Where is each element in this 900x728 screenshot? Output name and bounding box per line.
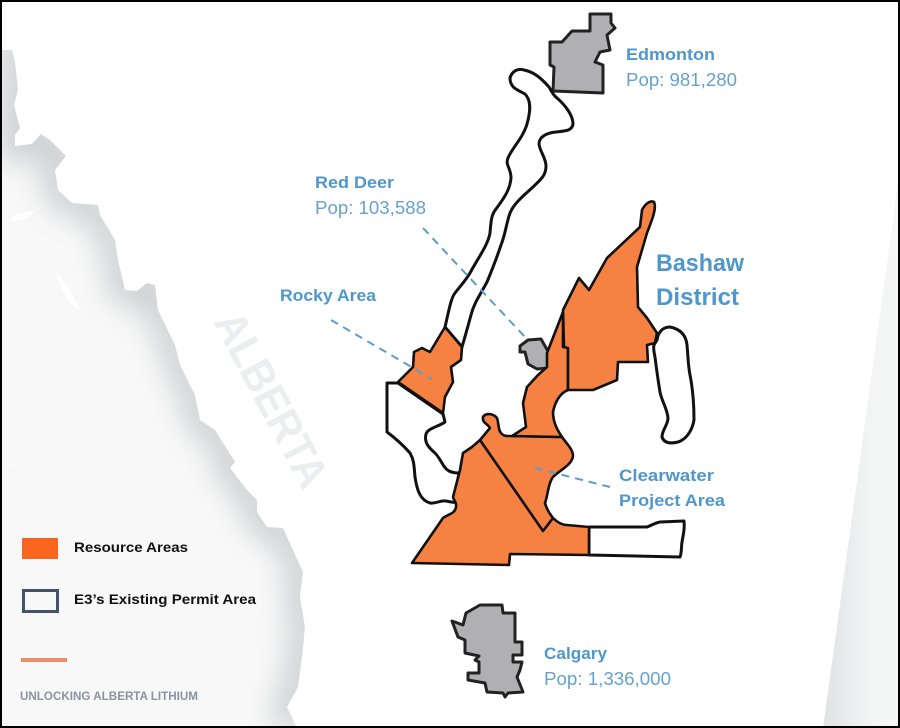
label: Calgary: Pop: 1,336,000	[544, 669, 671, 689]
label: Bashaw District: Bashaw	[656, 250, 744, 277]
resource area: Clearwater south	[412, 440, 589, 565]
western Alberta boundary shading	[2, 50, 305, 726]
footer tagline: UNLOCKING ALBERTA LITHIUM	[20, 691, 198, 703]
label: Calgary: Calgary	[544, 644, 608, 663]
icon: Calgary city outline	[452, 605, 523, 697]
resource area: central strip	[512, 312, 568, 437]
label: Edmonton	[626, 45, 737, 90]
label: Calgary	[544, 644, 671, 689]
resource area: Rocky	[398, 327, 462, 413]
icon: Red Deer city outline	[520, 339, 549, 369]
leader line: Rocky Area	[331, 320, 432, 379]
label: Rocky Area: Rocky Area	[280, 286, 377, 305]
legend label: resource areas: Resource Areas	[74, 539, 188, 555]
legend	[22, 538, 256, 612]
label: Bashaw District	[656, 250, 744, 311]
resource area: Bashaw	[563, 201, 657, 390]
permit area: southeast	[589, 521, 684, 557]
label: Edmonton: Edmonton	[626, 45, 715, 64]
legend swatch: resource areas	[22, 538, 58, 559]
label: Red Deer: Pop: 103,588	[315, 198, 426, 218]
leader line: Red Deer	[423, 228, 525, 337]
label: Edmonton: Pop: 981,280	[626, 70, 737, 90]
label: Clearwater Project Area	[619, 466, 726, 510]
accent rule	[21, 658, 67, 662]
legend swatch: permit area	[24, 590, 58, 612]
label: Bashaw District: District	[656, 284, 739, 311]
permit area: north corridor	[445, 69, 573, 347]
eastern Alberta boundary shading	[823, 183, 899, 728]
resource area: Clearwater north	[480, 414, 573, 531]
label: Clearwater Project Area: Clearwater	[619, 466, 714, 485]
ALBERTA watermark label: ALBERTA	[204, 303, 339, 496]
permit area: east	[654, 327, 694, 443]
permit area: southwest	[387, 383, 459, 503]
leader line: Clearwater	[535, 468, 610, 487]
legend label: permit area: E3’s Existing Permit Area	[74, 591, 256, 607]
label: Clearwater Project Area: Project Area	[619, 491, 726, 510]
icon: Edmonton city outline	[550, 14, 615, 93]
label: Red Deer	[315, 173, 426, 218]
label: Red Deer: Red Deer	[315, 173, 394, 192]
